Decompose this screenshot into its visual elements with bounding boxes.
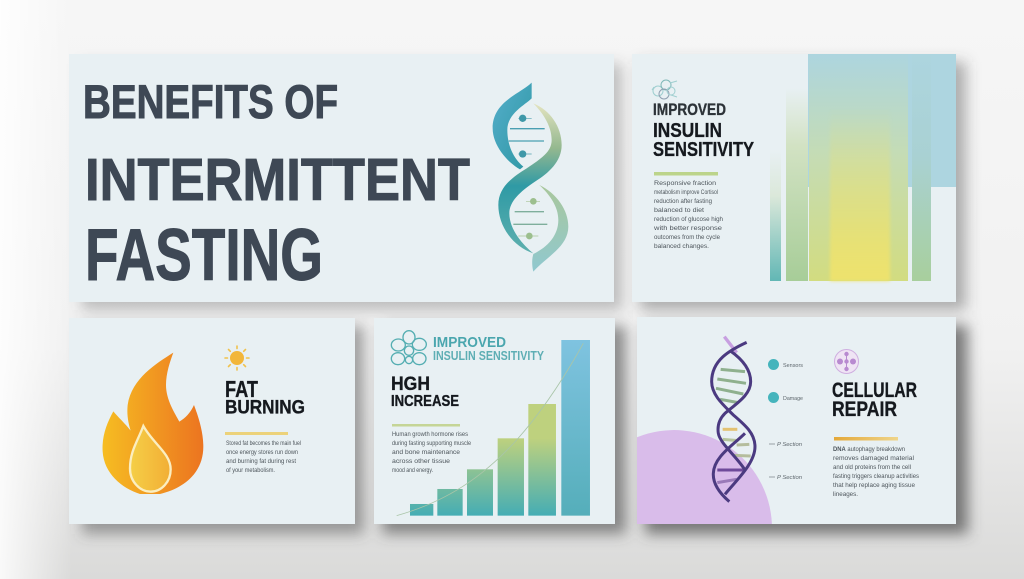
heading: benefits of intermittent fasting: INTERMITTENT (85, 147, 470, 213)
heading: improved insulin sensitivity (433, 334, 545, 363)
text block: insulin description: Responsive fraction (654, 180, 717, 187)
heading: cellular repair: CELLULAR (832, 379, 917, 402)
heading: improved insulin sensitivity: INSULIN (653, 119, 722, 142)
panel: cellular repair (637, 317, 956, 524)
text block: cellular repair description: fasting triggers cleanup activities (833, 473, 919, 480)
heading: benefits of intermittent fasting: FASTING (85, 215, 323, 296)
panel: fat burning (69, 318, 355, 524)
text block: fat burning description: Stored fat becomes the main fuel (226, 440, 301, 447)
text block: insulin description: with better response (653, 225, 723, 232)
legend: DNA labels: P Section (777, 442, 802, 448)
panel: hgh increase (374, 318, 615, 524)
text block: hgh description (392, 431, 471, 474)
text block: insulin description: reduction of glucose high (654, 216, 724, 223)
decorative purple circle (637, 430, 772, 524)
heading: fat burning: BURNING (225, 398, 305, 418)
icon: purple cell badge (834, 350, 858, 374)
bar chart: rising bars with trend line (397, 340, 590, 516)
panel: improved insulin sensitivity (632, 54, 956, 302)
text block: fat burning description (226, 440, 301, 474)
icon: purple DNA helix (712, 337, 755, 502)
text block: insulin description: outcomes from the cycle (654, 234, 721, 241)
legend: DNA labels (768, 359, 803, 481)
text block: hgh description: during fasting supporting muscle (392, 440, 471, 447)
text block: insulin description: reduction after fasting (654, 198, 713, 205)
heading: hgh increase: HGH (391, 374, 430, 395)
icon: sun (225, 346, 249, 370)
heading: cellular repair (832, 379, 917, 421)
legend: DNA labels: Damage (783, 396, 803, 402)
text block: insulin description (653, 180, 724, 250)
text block: cellular repair description: DNA autophagy breakdown (833, 446, 906, 453)
icon: teal DNA helix (493, 83, 568, 272)
icon: flower molecule (391, 331, 426, 365)
text block: insulin description: metabolism improve Cortisol (654, 189, 718, 196)
text block: cellular repair description (833, 446, 919, 498)
heading: improved insulin sensitivity: IMPROVED (653, 100, 726, 119)
heading: improved insulin sensitivity: SENSITIVITY (653, 138, 754, 161)
text block: insulin description: balanced to diet (654, 207, 704, 214)
text block: cellular repair description: removes damaged material (833, 455, 914, 462)
heading: cellular repair: REPAIR (832, 398, 897, 421)
chart: tall gradient bars (770, 54, 956, 281)
icon: flame (103, 353, 203, 494)
text block: hgh description: across other tissue (392, 458, 451, 465)
legend: DNA labels: Sensors (783, 363, 803, 369)
heading: improved insulin sensitivity (653, 100, 754, 161)
text block: cellular repair description: and old proteins from the cell (833, 464, 911, 471)
icon: molecule (652, 80, 677, 99)
heading: fat burning: FAT (225, 376, 258, 402)
text block: fat burning description: once energy stores run down (226, 449, 298, 456)
text block: cellular repair description: lineages. (833, 491, 858, 498)
text block: hgh description: Human growth hormone rises (392, 431, 468, 438)
panel: main title (69, 54, 614, 302)
text block: fat burning description: and burning fat during rest (226, 458, 296, 465)
text block: hgh description: and bone maintenance (392, 449, 461, 456)
heading: improved insulin sensitivity: INSULIN SENSITIVITY (433, 349, 545, 363)
text block: hgh description: mood and energy. (392, 467, 433, 474)
text block: cellular repair description: that help replace aging tissue (833, 482, 916, 489)
legend: DNA labels: P Section (777, 475, 802, 481)
text block: fat burning description: of your metabolism. (226, 467, 275, 474)
heading: benefits of intermittent fasting: BENEFITS OF (83, 75, 338, 128)
text block: insulin description: balanced changes. (654, 243, 709, 250)
heading: hgh increase (391, 374, 459, 410)
heading: benefits of intermittent fasting (83, 75, 470, 296)
heading: hgh increase: INCREASE (391, 393, 459, 410)
heading: fat burning (225, 376, 305, 418)
heading: improved insulin sensitivity: IMPROVED (433, 334, 506, 351)
